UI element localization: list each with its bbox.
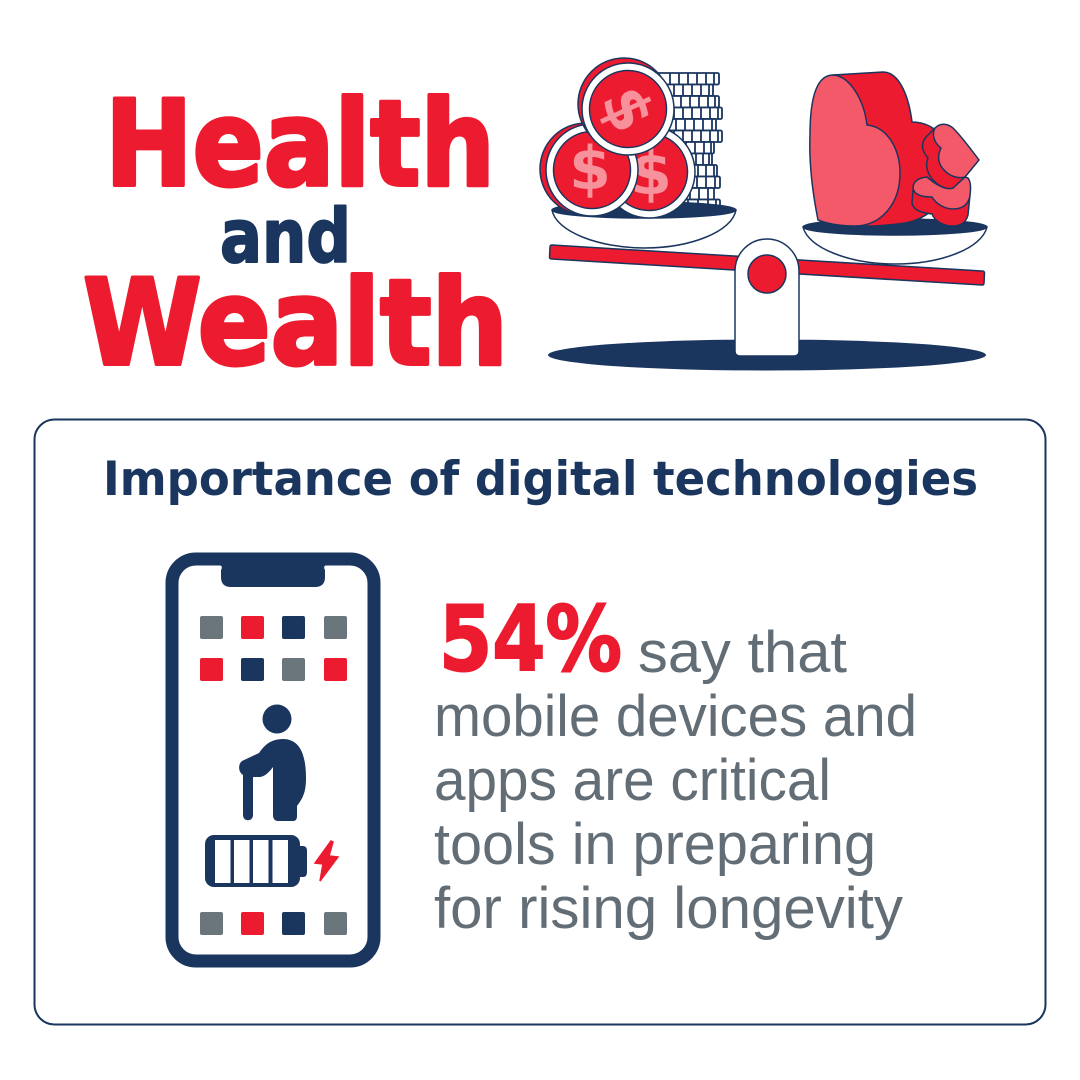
title — [83, 76, 508, 393]
description: tools in preparing — [434, 812, 876, 877]
right coin — [599, 124, 695, 218]
scale beam — [550, 245, 984, 285]
left bowl — [552, 202, 736, 248]
title: Wealth — [83, 255, 508, 393]
title: and — [220, 194, 351, 280]
title: Health — [105, 76, 495, 214]
icon: battery — [205, 835, 307, 887]
description: for rising longevity — [434, 876, 903, 941]
icon: balance scale with coins and hearts — [540, 58, 987, 370]
scale pivot — [735, 239, 799, 356]
bottom app row — [200, 912, 347, 935]
icon: smartphone — [172, 559, 374, 961]
left coin: $ — [569, 134, 611, 204]
right bowl — [803, 219, 987, 264]
statistic text — [434, 587, 917, 941]
top coin: $ — [587, 76, 668, 143]
left coin — [540, 123, 638, 216]
description: apps are critical — [434, 748, 831, 813]
top coin — [578, 58, 674, 155]
app grid — [200, 616, 347, 681]
icon: older person with cane — [239, 704, 306, 821]
description: say that — [638, 620, 847, 685]
large heart — [810, 72, 940, 226]
description — [434, 620, 917, 941]
54% figure: 54% — [439, 587, 622, 692]
panel: digital technologies — [34, 420, 1046, 1024]
scale shadow — [548, 340, 986, 370]
phone notch — [216, 564, 330, 587]
description: mobile devices and — [434, 684, 917, 749]
coin stack — [655, 73, 722, 211]
right coin: $ — [630, 139, 672, 209]
icon: lightning bolt — [315, 841, 338, 881]
heading: Importance of digital technologies — [103, 452, 978, 507]
small hearts — [912, 124, 979, 226]
